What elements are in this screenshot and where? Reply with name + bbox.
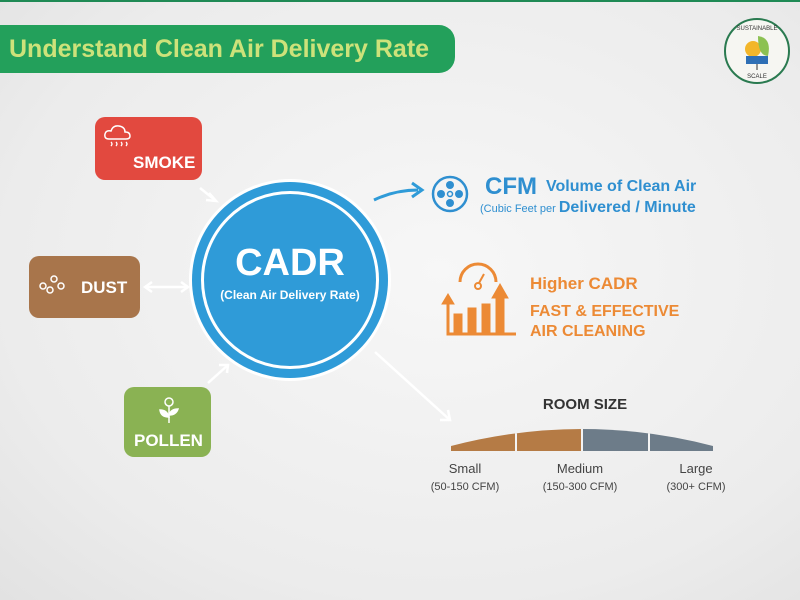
title	[0, 25, 455, 73]
room size chart: Small	[449, 461, 481, 476]
CFM block: (Cubic Feet per Delivered / Minute	[480, 199, 696, 216]
room size chart	[431, 396, 726, 493]
panel: pollen	[124, 387, 211, 457]
panel: smoke: SMOKE	[133, 153, 195, 172]
panel: pollen: POLLEN	[134, 431, 203, 450]
CFM block: Volume of Clean Air	[546, 178, 696, 195]
room size chart: ROOM SIZE	[543, 396, 627, 413]
logo: SUSTAINABLE	[737, 26, 777, 32]
panel: dust	[29, 256, 140, 318]
room size chart: Medium	[557, 461, 603, 476]
room size chart: (150-300 CFM)	[543, 481, 617, 493]
CFM block: CFM	[485, 173, 537, 200]
CADR circle: (Clean Air Delivery Rate)	[220, 288, 360, 302]
logo	[724, 18, 790, 84]
higher CADR block	[441, 262, 679, 340]
room size chart: (300+ CFM)	[666, 481, 726, 493]
title: Understand Clean Air Delivery Rate	[9, 35, 429, 63]
panel: dust: DUST	[81, 278, 127, 297]
higher CADR block: FAST & EFFECTIVE	[530, 303, 679, 320]
higher CADR block: AIR CLEANING	[530, 323, 646, 340]
room size chart: Large	[679, 461, 713, 476]
panel: smoke	[95, 117, 202, 180]
CADR circle	[192, 182, 388, 378]
CADR circle: CADR	[235, 242, 345, 284]
higher CADR block: Higher CADR	[530, 274, 638, 293]
room size chart: (50-150 CFM)	[431, 481, 499, 493]
logo: SCALE	[747, 74, 767, 80]
CFM block	[432, 173, 696, 216]
